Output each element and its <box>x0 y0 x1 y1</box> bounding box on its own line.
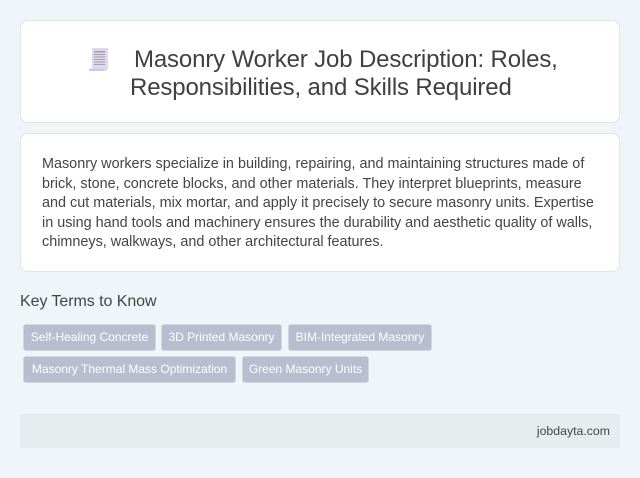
title text: Masonry Worker Job Description: Roles, <box>134 46 558 73</box>
description text: in using hand tools and machinery ensures the durability and aesthetic quality of walls, <box>42 214 592 230</box>
tag: Self-Healing Concrete <box>31 330 148 344</box>
title text <box>130 46 558 101</box>
icon: document scroll <box>89 48 108 71</box>
tag group <box>23 324 432 383</box>
footer source text: jobdayta.com <box>537 424 610 438</box>
tag: Masonry Thermal Mass Optimization <box>32 362 227 376</box>
tag: 3D Printed Masonry <box>168 330 275 344</box>
footer bar <box>20 414 620 448</box>
description text: brick, stone, concrete blocks, and other materials. They interpret blueprints, measure <box>42 176 582 192</box>
description text: chimneys, walkways, and other architectural features. <box>42 234 384 250</box>
tag: BIM-Integrated Masonry <box>296 330 424 344</box>
panel: description <box>20 133 620 272</box>
tag <box>23 324 156 351</box>
tag <box>161 324 282 351</box>
description text: Masonry workers specialize in building, repairing, and maintaining structures made of <box>42 156 584 172</box>
tag <box>23 356 236 383</box>
tag: Green Masonry Units <box>249 362 362 376</box>
tag <box>288 324 432 351</box>
title text: Responsibilities, and Skills Required <box>130 74 512 101</box>
panel: title <box>20 20 620 123</box>
tag <box>242 356 369 383</box>
heading: key terms: Key Terms to Know <box>20 293 157 310</box>
description text <box>42 156 594 250</box>
description text: and cut materials, mix mortar, and apply it precisely to secure masonry units. Expertise <box>42 195 594 211</box>
